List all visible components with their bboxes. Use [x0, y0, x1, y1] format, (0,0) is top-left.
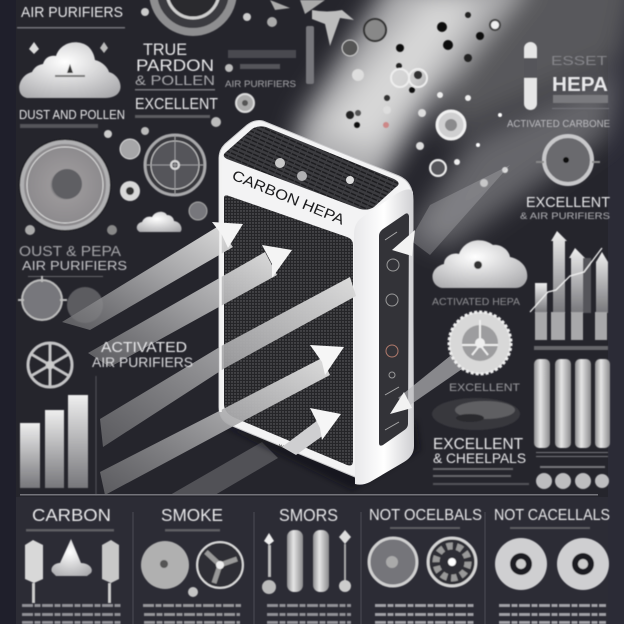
- column: carbon: [22, 505, 122, 622]
- text block: true pardon: [135, 40, 218, 118]
- device left edge highlight: [219, 155, 222, 412]
- column: not ocelbals: [369, 507, 482, 622]
- arrow: band three: [100, 277, 356, 447]
- icon: plume disc large: [437, 111, 465, 139]
- icon: large filter disc: [19, 139, 111, 231]
- text block: dust and pollen: DUST AND POLLEN: [19, 108, 125, 122]
- column: not ocelbals: NOT OCELBALS: [369, 507, 482, 524]
- text block: excellent air purifiers: [520, 194, 610, 222]
- icon: small cloud: [137, 212, 182, 232]
- text block: hepa heading: ACTIVATED CARBONE: [507, 118, 610, 130]
- text block: air purifiers heading: [17, 5, 125, 28]
- text block: excellent chemicals: [433, 436, 529, 485]
- text block: true pardon: & POLLEN: [135, 72, 215, 88]
- icon: small ring: [236, 94, 254, 112]
- text block: excellent air purifiers: & AIR PURIFIERS: [520, 211, 610, 222]
- column: smors: [262, 505, 351, 622]
- text block: activated hepa: ACTIVATED HEPA: [432, 296, 520, 308]
- column: smors: SMORS: [279, 505, 338, 525]
- icon: wheel: [28, 343, 72, 387]
- text block: dust and hepa: OUST & PEPA: [19, 243, 121, 260]
- icon: capsule filter: [524, 42, 537, 110]
- text block: dust and hepa: [19, 243, 127, 277]
- device foot badge: WOOD: [277, 443, 295, 455]
- icon: fan burst: [449, 312, 511, 374]
- icon: dark carbon pile: [432, 398, 520, 430]
- arrow: band four: [100, 358, 330, 495]
- icon: gauge disc: [536, 136, 600, 184]
- icon: ring with crosshair: [145, 135, 205, 195]
- text block: faded air purifiers: AIR PURIFIERS: [225, 79, 296, 90]
- device top grille: [224, 126, 399, 210]
- device body: [219, 120, 413, 478]
- icon: upper cylinders: [534, 312, 608, 350]
- text block: excellent air purifiers: EXCELLENT: [526, 194, 610, 211]
- icon: large cloud: [19, 42, 121, 98]
- text block: excellent faded: EXCELLENT: [449, 382, 520, 394]
- arrow: band five: [282, 420, 328, 455]
- text block: activated air purifiers: ACTIVATED: [101, 339, 187, 356]
- smoke plume: [290, 0, 624, 250]
- text block: dust and pollen: [19, 108, 125, 128]
- airborne particles: [342, 12, 508, 187]
- arrow head: five: [310, 408, 341, 440]
- device control panel: [379, 213, 409, 446]
- arrow: tail behind device: [170, 442, 278, 495]
- text block: activated air purifiers: AIR PURIFIERS: [92, 354, 193, 370]
- icon: lower left ring: [18, 276, 103, 323]
- icon: lower cylinders: [534, 359, 610, 468]
- text block: hepa heading: ESSET: [551, 53, 607, 68]
- arrow: inbound top right: [392, 165, 510, 256]
- top centre ring fragment: [141, 0, 354, 46]
- text block: hepa heading: HEPA: [552, 74, 608, 96]
- text block: true pardon: PARDON: [136, 56, 214, 75]
- text block: dust and hepa: AIR PURIFIERS: [22, 258, 127, 273]
- icon: plume disc small: [430, 160, 446, 176]
- column: smoke: SMOKE: [161, 505, 223, 525]
- device: air purifier: [210, 120, 420, 490]
- arrow: band one: [62, 227, 233, 330]
- bar chart: left: [20, 376, 96, 495]
- text block: true pardon: EXCELLENT: [135, 96, 218, 113]
- text block: faded air purifiers: [225, 50, 296, 90]
- column: not cacellals: NOT CACELLALS: [494, 507, 610, 524]
- device mesh: [224, 195, 353, 466]
- panel: bottom columns: [20, 494, 610, 624]
- device shadow: [210, 420, 420, 490]
- arrow: inbound lower right: [390, 352, 478, 414]
- text block: hepa heading: [507, 53, 610, 130]
- arrow: band two: [88, 252, 277, 367]
- icon: row of small discs: [536, 473, 609, 489]
- arrow head: one: [212, 222, 243, 248]
- column: smoke: [141, 505, 243, 622]
- device label: CARBON HEPA: [229, 168, 347, 229]
- column: not cacellals: [494, 507, 610, 622]
- text block: activated air purifiers: [92, 339, 193, 370]
- icon: right cloud: [432, 240, 527, 288]
- icon: small discs: [25, 117, 221, 235]
- column: carbon: CARBON: [32, 505, 111, 525]
- device side shading: [354, 189, 414, 485]
- text block: excellent chemicals: EXCELLENT: [433, 436, 524, 453]
- bar chart: right arrows: [530, 231, 608, 313]
- text block: true pardon: TRUE: [143, 40, 187, 59]
- text block: air purifiers heading: AIR PURIFIERS: [21, 5, 123, 21]
- text block: excellent chemicals: & CHEELPALS: [433, 451, 526, 466]
- icon: vertical filter panel: [306, 26, 314, 84]
- arrow head: four: [310, 345, 344, 375]
- arrow head: two: [262, 245, 292, 278]
